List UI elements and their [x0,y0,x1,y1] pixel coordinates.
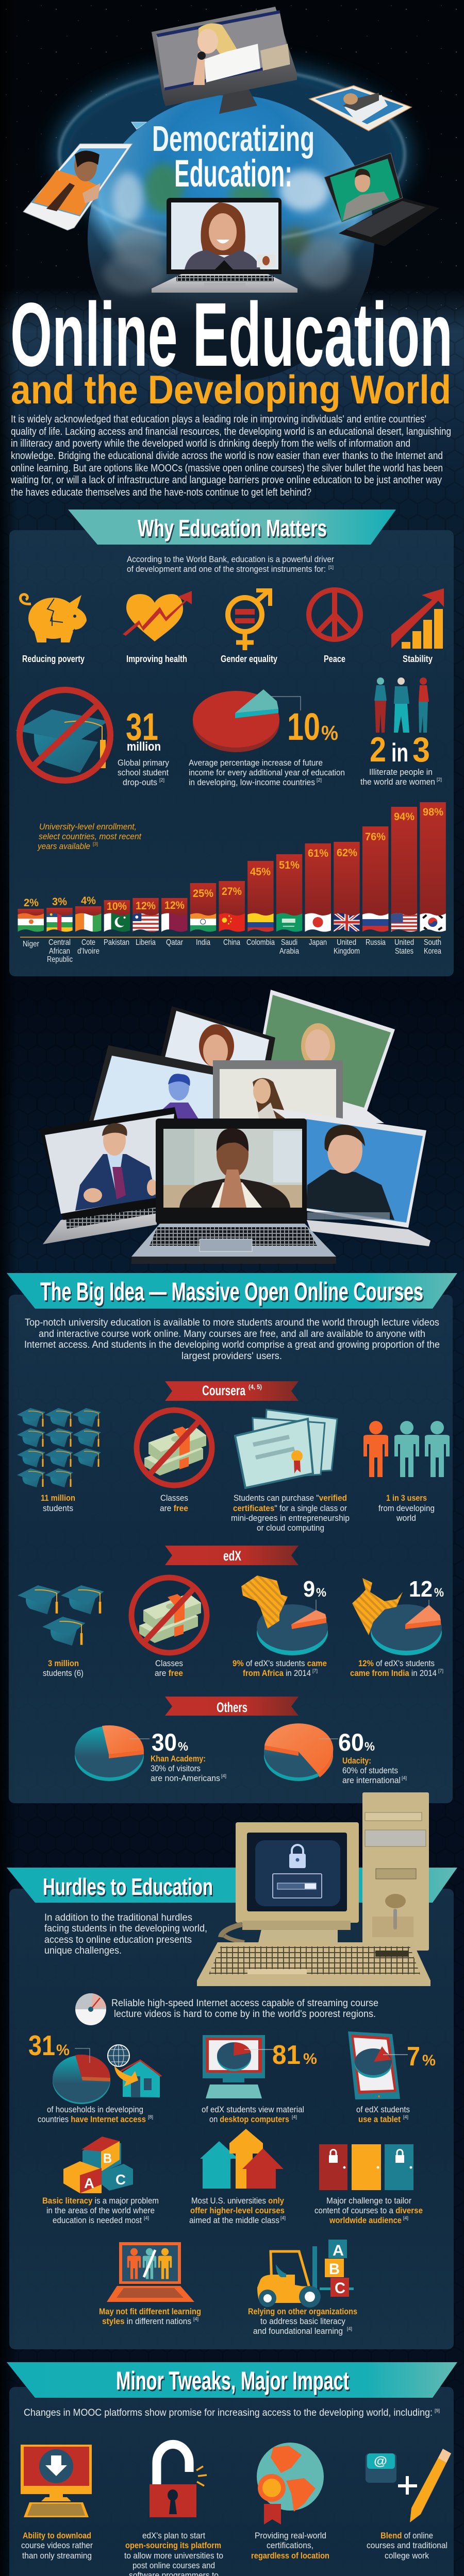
icon: no money [137,1410,212,1485]
stat: 10%: 10 [287,705,320,748]
country names: India [196,938,210,947]
value labels: 4% [81,895,96,907]
flag: Qatar [161,913,188,931]
text: India: came from India in 2014 [350,1668,437,1678]
chart: 9% from Africa: % [316,1586,326,1600]
icon: forklift with ABC blocks: A [333,2242,344,2259]
country names: Central [48,938,71,947]
intro paragraph: in illiteracy and poverty while the developed world is drinking deeply from the wells of information and [11,438,410,449]
text: 1 in 3 users: world [396,1513,416,1523]
text: desktop [202,2105,304,2124]
icon: stability bars and arrow [391,588,444,649]
stat: 31% households: % [56,2042,70,2059]
text: diverse audience: content of courses to a diverse [314,2206,423,2215]
stat: 2 in 3: Illiterate people in [369,767,433,777]
text: diverse audience [314,2196,423,2225]
text: desktop: on desktop computers [209,2114,289,2124]
country names: Arabia [279,947,299,956]
value labels: 61% [308,848,328,859]
text: World Bank intro [127,554,334,574]
icon: login lock on screen [273,1845,322,1898]
title: Democratizing Education: Democratizing [152,118,314,159]
globe [54,62,410,386]
flag: China [219,913,245,931]
text: blend [367,2531,448,2561]
banner heading: Why Education Matters: Why Education Matters [138,515,327,541]
icon: tablet with pie [348,2031,408,2099]
tower [362,1792,429,1951]
icon: at key plus pencil: @ [374,2454,387,2468]
panel: Why Education Matters [9,510,454,976]
text: hurdles intro: unique challenges. [44,1945,122,1956]
text: verified certificates: mini-degrees in entrepreneurship [231,1513,350,1523]
hero illustration: globe and devices [23,7,439,386]
stat: 10%: % [321,722,338,744]
icon: silver laptop centre with smiling woman [152,198,297,293]
text: Khan Academy [151,1754,226,1783]
text: learning styles [99,2307,201,2326]
ribbon: edX [165,1546,299,1565]
text: MOOC description [24,1317,440,1362]
text: higher-level courses: aimed at the middle class [189,2215,279,2225]
text: World Bank intro: [1] [328,565,334,570]
text: Khan Academy: Khan Academy: [151,1754,206,1764]
flag: Cote d'Ivoire [75,913,101,931]
icon: globe with award rosette [257,2443,324,2524]
country names: United [394,938,414,947]
text: ability to download [21,2531,93,2561]
stat: 31% households [28,2029,110,2104]
value labels: 62% [337,847,357,859]
stat: 81%: % [303,2050,317,2067]
text: Khan Academy: [4] [221,1773,226,1778]
icon: no money [131,1578,207,1653]
text: 11 million students [41,1493,75,1513]
stat: 31 million: Global primary [118,758,169,768]
stat: 2 in 3: 3 [412,730,430,769]
text: World Bank intro: According to the World Bank, education is a powerful driver [127,554,334,564]
icon: certificates [235,1410,337,1488]
country names: Saudi [281,938,297,947]
chart: 9% from Africa [241,1575,328,1655]
country names: South [424,938,441,947]
text: blend: Blend of online [380,2531,433,2540]
text: other organizations [248,2307,357,2336]
stat: 81%: 81 [272,2040,301,2070]
stat: 81% [272,2040,317,2070]
text: households: [8] [148,2114,153,2120]
text: India [350,1658,443,1678]
title: Democratizing Education [152,118,314,195]
ribbon: Others: Others [217,1700,247,1715]
chart: Udacity 60%: 60 [338,1728,364,1756]
stat: 7%: 7 [407,2042,420,2072]
text: learning styles: styles in different nations [102,2316,191,2326]
value labels: 27% [222,886,242,897]
chart: 12% from India [352,1577,444,1655]
text: higher-level courses: offer higher-level courses [190,2206,285,2215]
value labels: 12% [136,900,156,912]
icon: tablet left with man in orange shirt [23,144,132,230]
text: verified certificates [231,1493,350,1533]
text: MOOC description: largest providers' users. [181,1351,282,1362]
text: certifications [251,2531,329,2561]
laptop: man on mac [271,1108,430,1246]
text: 1 in 3 users: from developing [378,1503,435,1513]
text: 11 million students: 11 million [41,1493,75,1503]
country names: States [395,947,413,956]
text: Udacity: Udacity: [342,1756,371,1766]
illustration: old dusty computer [197,1792,430,1986]
icon: forklift with ABC blocks [257,2240,354,2308]
text: Africa: from Africa in 2014 [243,1668,311,1678]
text: open-sourcing: edX's plan to start [142,2531,205,2540]
text: high-speed internet [111,1998,378,2020]
icon: ABC blocks: A [84,2175,94,2191]
text: certifications: regardless of location [251,2551,329,2561]
label: Reducing poverty [22,654,85,664]
stat: 2 in 3: in [391,738,408,767]
text: verified certificates: Students can purchase "verified [234,1493,347,1503]
icon: no graduation cap [15,690,110,781]
text: high-speed internet: lecture videos is hard to come by in the world's poorest regions. [114,2009,376,2020]
label: Gender equality [221,654,277,664]
value labels [24,806,443,912]
text: blend: courses and traditional [367,2540,448,2550]
country names: Cote [81,938,95,947]
text: Udacity: 60% of students [342,1766,398,1775]
text: diverse audience: worldwide audience [329,2215,402,2225]
intro paragraph [10,414,451,498]
text: other organizations: [4] [347,2326,352,2331]
laptop: blue tinted student [89,1045,213,1123]
flag: United States [391,912,418,933]
text: Africa [233,1658,327,1678]
banner heading: Hurdles to Education: Hurdles to Education [43,1873,213,1900]
text: 1 in 3 users [378,1493,435,1523]
icon: ABC blocks [63,2137,133,2193]
icon: ABC blocks: B [103,2150,112,2166]
chart: Khan Academy 30%: % [178,1740,188,1754]
text: World Bank intro: of development and one of the strongest instruments for: [127,564,326,574]
stat: 31 million: 31 [126,705,158,748]
stat: 10%: Average percentage increase of future [189,758,323,768]
chart: Udacity 60% [264,1723,375,1781]
stat: 2 in 3: the world are women [360,777,435,787]
stat: 31 million: [2] [159,777,164,783]
text: high-speed internet: Reliable high-speed Internet access capable of streaming course [111,1998,378,2009]
country names: Korea [424,947,441,956]
icon: peace symbol [309,590,360,639]
banner heading: Minor Tweaks [7,2362,457,2398]
flag: India [190,912,217,933]
flag: Pakistan [104,912,130,933]
text: hurdles intro: access to online education presents [44,1935,192,1945]
icon group: 11 graduation caps [17,1408,101,1487]
chart label: University-level enrollment: [3] [93,841,98,846]
text: verified certificates: or cloud computing [257,1523,324,1533]
text: open-sourcing: open-sourcing its platform [125,2540,221,2550]
text: desktop: of edX students view material [202,2105,304,2114]
chart: 12% from India: % [434,1586,444,1600]
text: desktop: [4] [292,2114,297,2120]
country names: Japan [309,938,327,947]
text: basic literacy: Basic literacy is a major problem [42,2196,159,2206]
text: Udacity [342,1756,407,1785]
icon group: 3 graduation caps [18,1585,104,1646]
text: basic literacy [42,2196,159,2225]
country names: African [49,947,70,956]
banner heading: Minor Tweaks: Minor Tweaks, Major Impact [116,2366,349,2395]
text: ability to download: than only streaming [22,2551,92,2561]
text: households: countries have Internet access [38,2114,146,2124]
flag: Colombia [247,912,274,933]
label: Peace [324,654,345,664]
laptop: man in blue suit [40,1107,178,1244]
value labels: 94% [394,811,415,823]
text: classes are free [160,1493,188,1513]
text: India: [7] [438,1668,443,1673]
text: 3 million students: 3 million [48,1658,79,1668]
chart label: University-level enrollment: years available [37,841,90,851]
panel: Massive Open Online Courses [7,1273,457,1803]
stat: 10%: in developing, low-income countries [189,777,315,787]
value labels: 98% [423,806,443,818]
country names: China [223,938,240,947]
value labels: 76% [365,831,386,843]
panel: Hurdles to Education [7,1792,457,2349]
icon: house with internet [108,2045,161,2097]
label: Improving health [126,654,187,664]
flag: Russia [362,913,389,931]
text: learning styles: May not fit different learning [99,2307,201,2316]
stat: 31 million: school student [118,768,169,777]
intro paragraph: the haves educate themselves and the have-nots continue to get left behind? [11,487,311,498]
icon: speedometer [75,1993,106,2025]
icon: open padlock [150,2444,207,2517]
text: other organizations: Relying on other organizations [248,2307,357,2316]
chart: 12% from India: 12 [409,1577,433,1602]
text: ability to download: Ability to download [23,2531,91,2540]
flag: Liberia [132,912,159,933]
icon: three doors [319,2144,413,2190]
country names: Niger [23,940,40,948]
stat: 31 million [118,705,169,787]
text: MOOC changes intro: [9] [435,2408,440,2413]
stat: 31 million: million [127,740,161,754]
title: Democratizing Education: Education: [174,152,292,195]
text: MOOC changes intro: Changes in MOOC platforms show promise for increasing access to the developing world, including: [24,2408,433,2418]
country names: Pakistan [104,938,129,947]
value labels: 12% [164,900,185,911]
stat: 10% [189,705,345,787]
bars [18,802,446,916]
text: classes are free [155,1658,183,1678]
ribbon: Coursera: (4, 5) [248,1383,262,1391]
value labels: 45% [250,866,271,878]
text: classes are free: Classes [160,1493,188,1503]
text: basic literacy: education is needed most [53,2215,142,2225]
text: 3 million students: students (6) [43,1668,84,1678]
flag: Central African Republic [46,912,73,933]
country names: United [337,938,356,947]
icon: three people [374,677,429,733]
icon: tablet top right [309,86,411,131]
text: diverse audience: Major challenge to tailor [326,2196,411,2206]
text: open-sourcing: to allow more universities to [124,2551,223,2561]
flag: Japan [305,913,331,931]
text: blend: college work [385,2551,429,2561]
icon: forklift with ABC blocks: C [335,2280,345,2297]
chart: 9% from Africa: 9 [303,1577,315,1602]
chart label: University-level enrollment: University-level enrollment, [39,822,137,832]
icon: black laptop right with green screen [324,153,439,246]
chart: pie 10% income increase [193,689,301,752]
icon: broken piggy bank [20,595,87,642]
country names [23,938,441,964]
flag: South Korea [420,912,446,933]
value labels: 25% [193,888,213,900]
text: Africa: 9% of edX's students came [233,1658,327,1668]
icon: 1 in 3 people [363,1421,450,1477]
text: ability to download: course videos rather [21,2540,93,2550]
stat: 10%: [2] [317,777,322,783]
text: classes are free: are free [160,1503,188,1513]
text: classes are free: Classes [155,1658,183,1668]
text: hurdles intro [44,1912,207,1956]
text: basic literacy: in the areas of the world where [46,2206,155,2215]
stat: 7%: % [422,2052,436,2069]
text: open-sourcing [124,2531,223,2576]
text: 11 million students: students [43,1503,73,1513]
value labels: 51% [279,859,300,871]
panel: Minor Tweaks, Major Impact [7,2362,457,2576]
text: tablet: of edX students [356,2105,410,2114]
icon: gender equality symbol [228,588,272,650]
text: higher-level courses [189,2196,286,2225]
text: MOOC description: Internet access. And students in the developing world comprise a great and growing proportion of the [24,1340,440,1350]
stat: 2 in 3: [2] [437,777,442,782]
text: higher-level courses: [4] [280,2215,286,2221]
icon: forklift with ABC blocks: B [329,2261,340,2278]
text: classes are free: are free [155,1668,183,1678]
stat: 2 in 3 [360,730,442,787]
icon: laptop with different people [107,2242,194,2302]
text: hurdles intro: facing students in the developing world, [44,1923,207,1934]
label: Stability [403,654,433,664]
icon: at key plus pencil [366,2449,451,2522]
icon: desktop monitor with pie [203,2035,275,2098]
country names: Qatar [166,938,184,947]
keyboard [197,1942,430,1986]
text: Udacity: [4] [402,1775,407,1781]
text: hurdles intro: In addition to the traditional hurdles [44,1912,192,1923]
chart label: University-level enrollment [37,822,142,851]
country names: Colombia [246,938,275,947]
banner heading: Hurdles to Education [7,1868,457,1903]
text: open-sourcing: post online courses and [132,2561,215,2570]
text: other organizations: to address basic literacy [260,2316,345,2326]
banner heading: Why Education Matters [68,510,396,545]
text: learning styles: [4] [193,2316,198,2321]
icon: download monitor [21,2445,92,2517]
stat: 10%: income for every additional year of education [189,768,345,777]
text: verified certificates: certificates" for a single class or [233,1503,347,1513]
icon: heart with rising arrow [123,591,192,641]
flag: United Kingdom [334,912,360,933]
flag: Saudi Arabia [276,913,302,931]
chart: Udacity 60%: % [364,1740,375,1754]
value labels: 2% [24,897,39,909]
laptop: woman centre front [131,1118,336,1264]
value labels: 10% [107,901,127,912]
text: MOOC description: and interactive course work online. Many courses are free, and all are available to anyone with [39,1329,425,1340]
text: certifications: Providing real-world [255,2531,326,2540]
text: tablet: use a tablet [358,2114,401,2124]
country names: Kingdom [334,947,360,956]
chart: Khan Academy 30%: 30 [152,1728,177,1756]
text: higher-level courses: Most U.S. universities only [191,2196,284,2206]
text: Khan Academy: 30% of visitors [151,1764,201,1773]
text: certifications: certifications, [267,2540,313,2550]
stat: 31 million: drop-outs [123,777,157,787]
text: other organizations: and foundational learning [253,2326,343,2336]
text: India: 12% of edX's students [358,1658,435,1668]
text: MOOC description: Top-notch university education is available to more students around the world through lecture videos [25,1317,439,1328]
country names: Republic [47,955,73,964]
flag: Niger [18,913,44,931]
icon: three arrows [200,2129,284,2189]
text: diverse audience: [4] [403,2215,408,2221]
country names: Liberia [136,938,156,947]
laptop: green screen blonde woman [255,990,395,1123]
text: tablet: [4] [403,2114,408,2120]
laptop: woman with glasses [213,1060,343,1125]
text: tablet [356,2105,410,2124]
ribbon: Coursera [165,1381,299,1401]
text: basic literacy: [4] [144,2215,149,2221]
text: 3 million students [43,1658,84,1678]
ribbon: edX: edX [223,1548,241,1564]
ribbon: Others [165,1697,299,1716]
stat: 31% households: 31 [28,2029,55,2061]
text: households: of households in developing [47,2105,143,2114]
text: Africa: [7] [312,1668,318,1673]
bar chart: enrollment by country [18,802,446,964]
laptop: red haired woman [160,1006,275,1077]
country names: d'Ivoire [77,947,100,956]
text: households [38,2105,153,2124]
chart: Khan Academy 30% [75,1725,188,1781]
icon: desktop monitor with lecturer [152,7,297,114]
ribbon: Coursera: Coursera [202,1383,246,1398]
chart label: University-level enrollment: select countries, most recent [39,832,142,841]
icon: ABC blocks: C [115,2172,126,2188]
text: Udacity: are international [342,1775,401,1785]
stat: 2 in 3: 2 [370,730,386,769]
stat: 7% [407,2042,436,2072]
country names: Russia [366,938,386,947]
monitor [221,1822,359,1945]
laptop collage [40,990,430,1264]
text: Khan Academy: are non-Americans [151,1773,220,1783]
value labels: 3% [52,896,67,908]
text: 1 in 3 users: 1 in 3 users [386,1493,427,1503]
